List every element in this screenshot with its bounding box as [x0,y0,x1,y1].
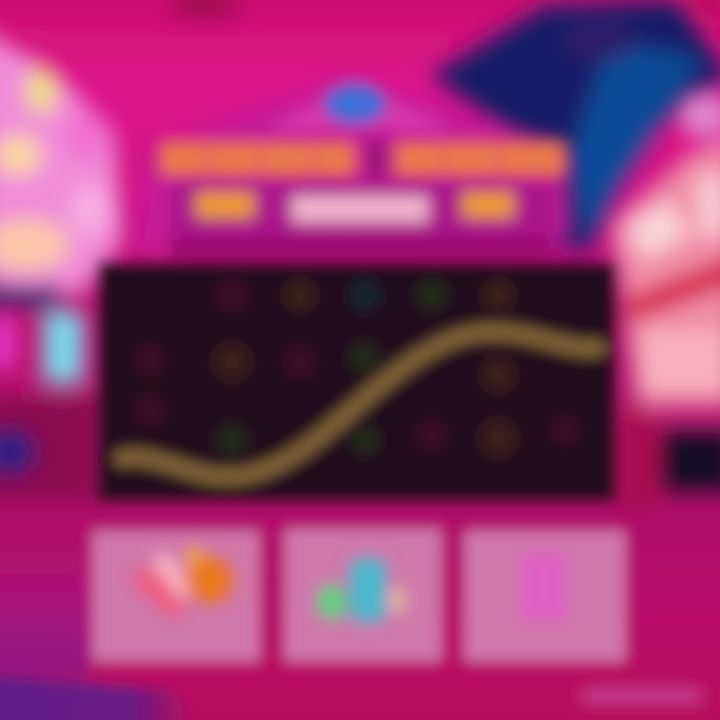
line chart curve [122,332,598,477]
marquee roof [135,75,570,250]
card: right [464,530,626,662]
icon: teal and green shapes [317,558,408,622]
card: middle [284,528,442,662]
card: left [92,530,260,662]
headline band [160,138,565,180]
dark blue starry sky panel [430,0,720,250]
icon: pink tall shape [522,552,566,622]
icon: blue dome [325,85,385,123]
right neon building [612,93,720,510]
icon: red stripes and orange ball [128,547,234,618]
grid of dim lights [124,269,589,468]
footer mark [582,688,702,704]
subtitle row [170,184,552,256]
marquee sign [135,75,570,256]
bottom cards [92,528,626,662]
left neon building [0,30,122,500]
dark chart panel [98,262,616,502]
